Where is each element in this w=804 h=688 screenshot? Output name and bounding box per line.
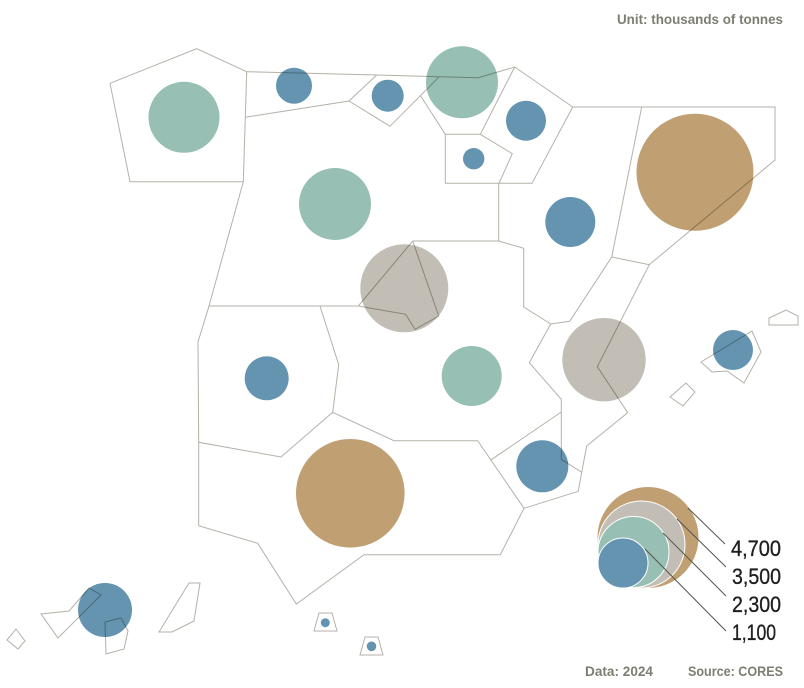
bubble: Galicia (148, 82, 220, 153)
size legend: 3,500 (732, 564, 781, 589)
bubble: Canary Islands (78, 583, 132, 637)
size legend: 1,100 (732, 620, 776, 645)
bubble: Navarre (506, 101, 546, 141)
bubble: La Rioja (463, 148, 484, 169)
bubble: Asturias (276, 68, 312, 104)
data year note: Data: 2024 (585, 663, 653, 679)
bubble: Madrid (360, 244, 448, 332)
size legend: 2,300 (732, 592, 781, 617)
bubble: Aragon (545, 197, 595, 247)
bubble: Castile and Leon (299, 168, 371, 240)
bubble: Castile-La Mancha (442, 346, 502, 406)
bubble: Murcia (516, 440, 568, 492)
size legend: 4,700 (731, 536, 781, 561)
bubble: Balearic Islands (713, 330, 753, 370)
bubbles by region (78, 46, 754, 651)
bubble: Cantabria (372, 80, 404, 112)
bubble: Melilla (367, 642, 376, 651)
unit note: Unit: thousands of tonnes (617, 11, 783, 27)
size legend (598, 487, 781, 645)
bubble: Ceuta (321, 618, 330, 627)
source note: Source: CORES (688, 663, 783, 679)
bubble: Andalusia (296, 439, 405, 548)
bubble: Catalonia (636, 114, 754, 231)
bubble: Valencia (562, 318, 646, 401)
bubble: Basque Country (426, 46, 498, 118)
bubble: Extremadura (245, 356, 289, 400)
